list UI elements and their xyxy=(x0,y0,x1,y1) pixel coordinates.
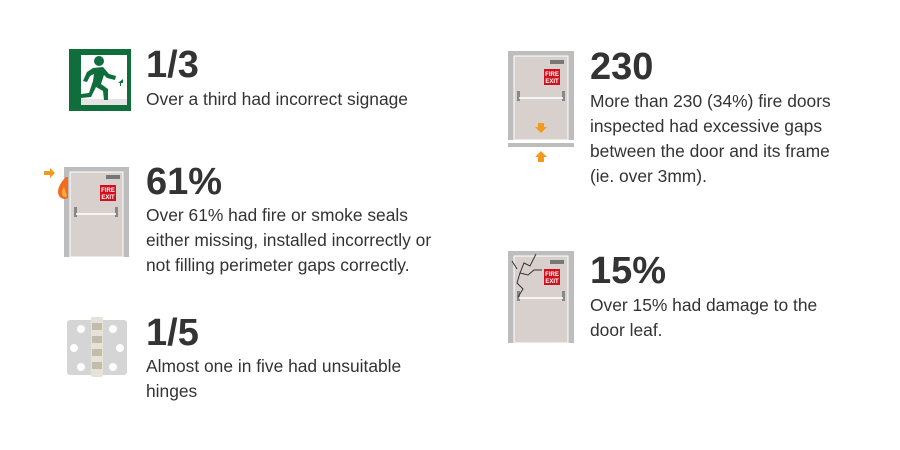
stat: 15% xyxy=(590,250,817,340)
icon: door with fire: FIRE xyxy=(101,188,115,194)
stat: 1/3 xyxy=(146,44,408,109)
stat: 15%: 15% xyxy=(590,250,666,292)
stat: 1/5: Almost one in five had unsuitable xyxy=(146,356,401,376)
icon: damaged door xyxy=(508,251,574,343)
stat: 1/5 xyxy=(146,312,401,401)
icon: door with gap arrows xyxy=(508,51,574,162)
stat: 230: between the door and its frame xyxy=(590,141,830,161)
stat: 61% xyxy=(146,161,431,275)
stat: 15%: door leaf. xyxy=(590,320,663,340)
stat: 230: More than 230 (34%) fire doors xyxy=(590,91,831,111)
stat: 61%: Over 61% had fire or smoke seals xyxy=(146,205,408,225)
stat: 61%: either missing, installed incorrectly or xyxy=(146,230,431,250)
stat: 1/5: 1/5 xyxy=(146,312,199,354)
stat: 1/3: Over a third had incorrect signage xyxy=(146,89,408,109)
stat: 230: 230 xyxy=(590,46,653,88)
stat: 230: (ie. over 3mm). xyxy=(590,166,707,186)
icon: damaged door: FIRE xyxy=(545,272,559,278)
stat: 61%: 61% xyxy=(146,161,222,203)
icon: hinge xyxy=(67,317,127,377)
icon: door with gap arrows: FIRE xyxy=(545,72,559,78)
icon: door with fire xyxy=(44,167,129,257)
icon: door with fire: EXIT xyxy=(101,195,115,201)
stat: 15%: Over 15% had damage to the xyxy=(590,295,817,315)
icon: door with gap arrows: EXIT xyxy=(545,79,559,85)
stat: 1/5: hinges xyxy=(146,381,197,401)
stat: 230 xyxy=(590,46,831,186)
stat: 230: inspected had excessive gaps xyxy=(590,116,822,136)
stat: 61%: not filling perimeter gaps correctly. xyxy=(146,255,410,275)
stat: 1/3: 1/3 xyxy=(146,44,199,86)
icon: damaged door: EXIT xyxy=(545,279,559,285)
icon: exit sign xyxy=(69,49,131,111)
